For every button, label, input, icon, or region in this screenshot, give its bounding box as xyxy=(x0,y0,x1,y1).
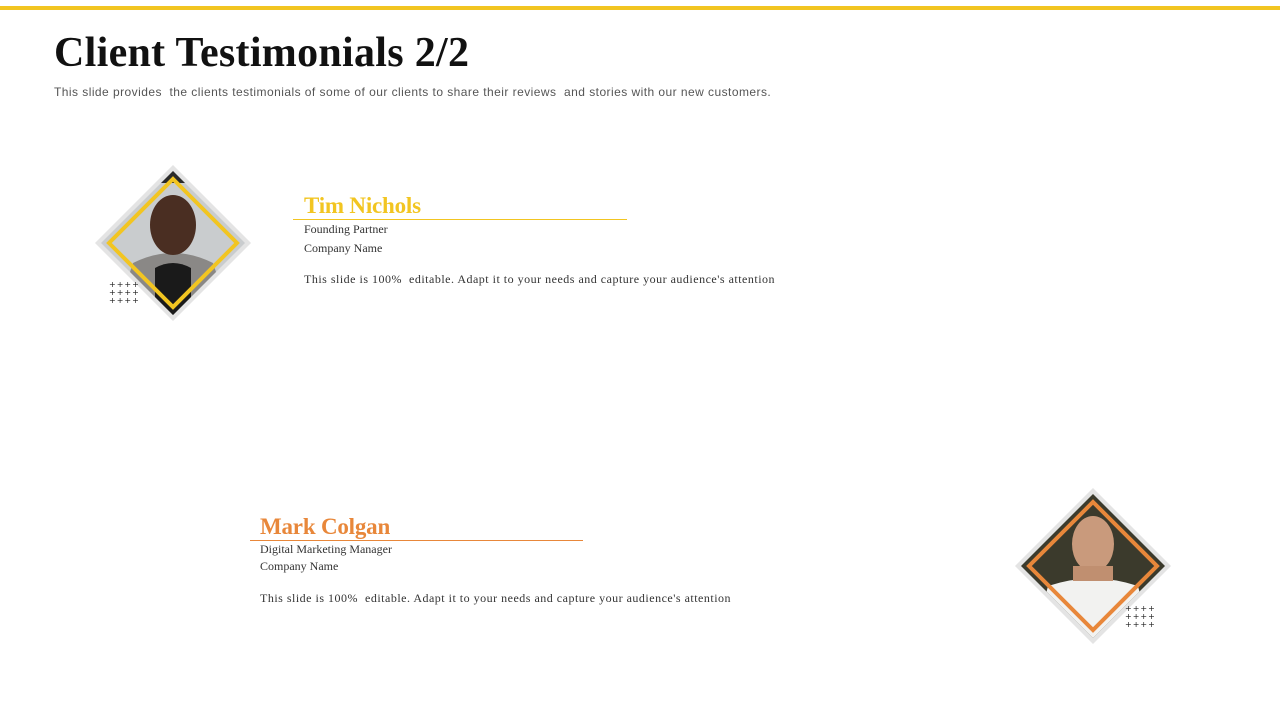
testimonial: Mark Colgan: Digital Marketing Manager xyxy=(260,542,392,556)
testimonial: Tim Nichols: Tim Nichols xyxy=(304,193,421,218)
photo: Mark Colgan xyxy=(1015,488,1171,644)
pattern: plus signs xyxy=(109,280,140,305)
testimonial: Mark Colgan xyxy=(250,514,731,605)
photo: Tim Nichols xyxy=(95,165,251,321)
testimonial: Tim Nichols: Founding Partner xyxy=(304,222,388,236)
testimonial: Tim Nichols xyxy=(293,193,775,286)
pattern: plus signs xyxy=(1125,604,1156,629)
subtitle: This slide provides the clients testimonials of some of our clients to share their reviews and stories with our new customers. xyxy=(54,85,771,99)
testimonial: Mark Colgan: Mark Colgan xyxy=(260,514,390,539)
pattern: plus signs: ++++ xyxy=(1125,620,1156,629)
title: Client Testimonials 2/2 xyxy=(54,30,469,76)
testimonial: Tim Nichols: This slide is 100% editable. Adapt it to your needs and capture your audience's attention xyxy=(304,272,775,286)
top bar xyxy=(0,6,1280,10)
pattern: plus signs: ++++ xyxy=(1125,612,1156,621)
testimonial: Mark Colgan: Company Name xyxy=(260,559,338,573)
pattern: plus signs: ++++ xyxy=(1125,604,1156,613)
pattern: plus signs: ++++ xyxy=(109,296,140,305)
pattern: plus signs: ++++ xyxy=(109,280,140,289)
testimonial: Tim Nichols: Company Name xyxy=(304,241,382,255)
testimonial: Mark Colgan: This slide is 100% editable. Adapt it to your needs and capture your audience's attention xyxy=(260,591,731,605)
pattern: plus signs: ++++ xyxy=(109,288,140,297)
